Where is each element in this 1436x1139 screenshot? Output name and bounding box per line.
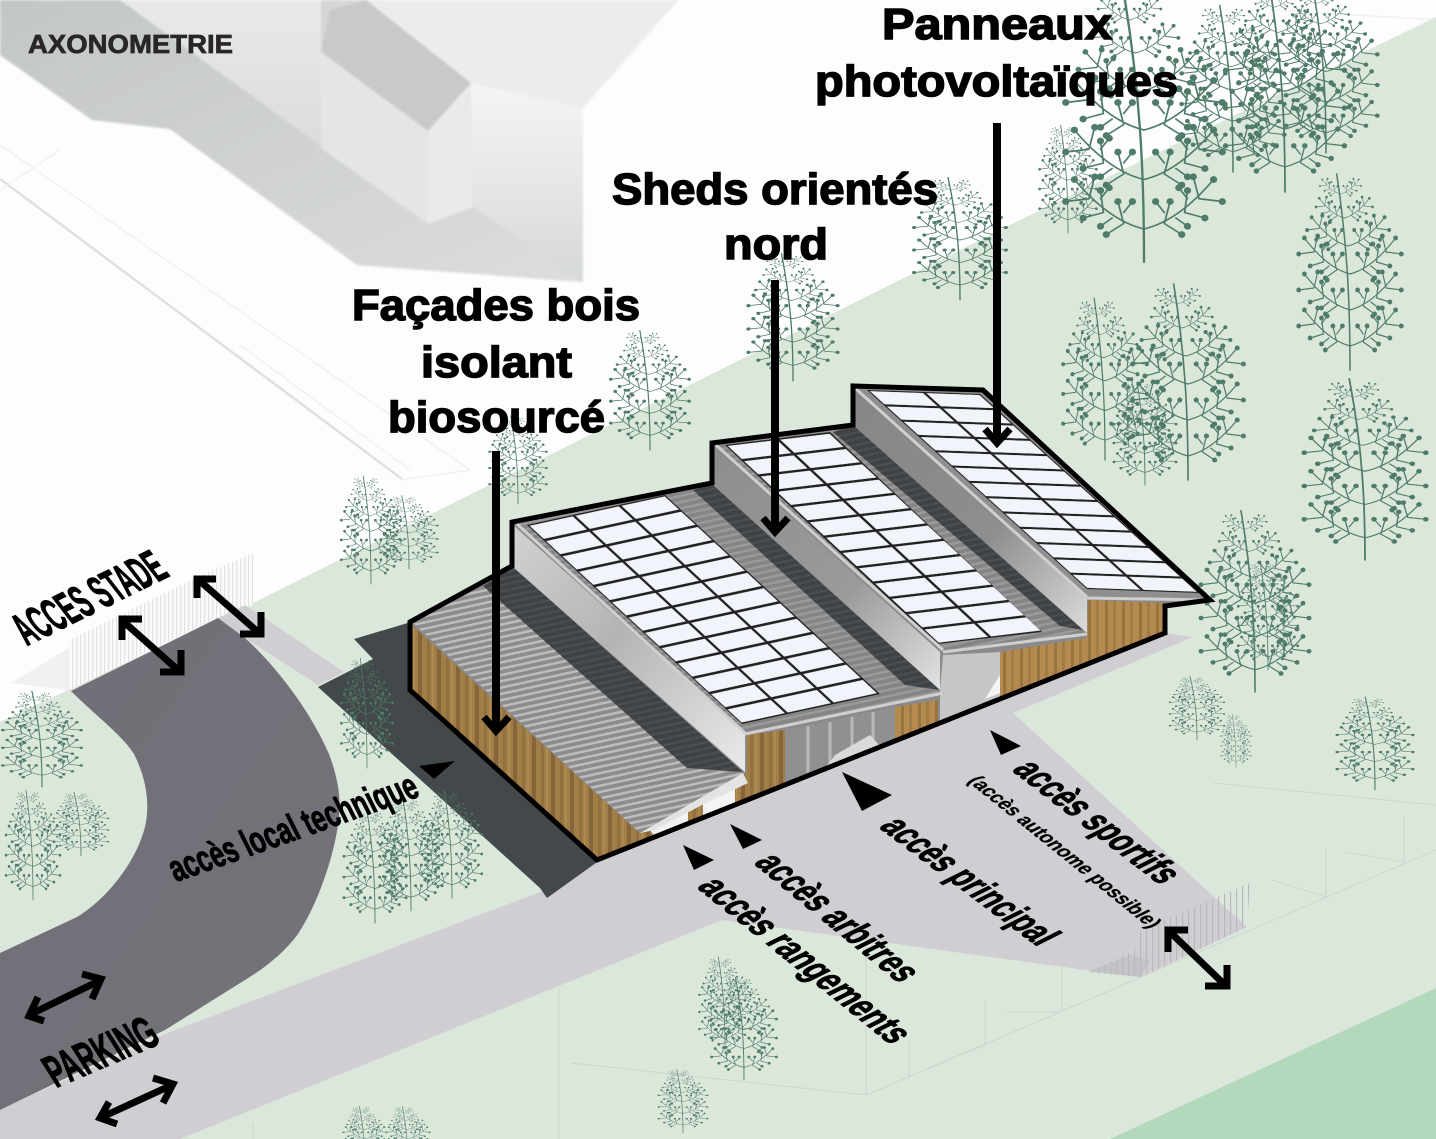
- fence: sports access: [1088, 883, 1250, 977]
- tree: [1220, 714, 1252, 768]
- corrugated roof: [412, 586, 743, 833]
- tree: [1, 691, 83, 787]
- front facade pieces: [610, 600, 1165, 854]
- shadow between shed 2 and shed 3: [833, 425, 1083, 630]
- tree: [53, 792, 109, 856]
- double arrow: stade 1: [122, 619, 181, 672]
- road: dark grey curved access road: [0, 618, 340, 1110]
- tree: [1296, 174, 1404, 370]
- road: light grey access path: [0, 633, 1247, 1139]
- tree: [379, 798, 443, 911]
- tree: [698, 957, 752, 1050]
- tree: [340, 476, 402, 584]
- building: [410, 386, 1210, 860]
- neighbouring building volume: [0, 0, 678, 282]
- tree: [5, 790, 61, 900]
- site lines: lower green: [253, 783, 1436, 1139]
- tree: [1179, 5, 1287, 172]
- shed 1 roof strip: [517, 490, 945, 733]
- label: acces sportifs: accès sportifs: [1003, 754, 1192, 889]
- tree: [379, 496, 439, 569]
- label: acces rangements: accès rangements: [688, 871, 923, 1049]
- label: acces local technique: accès local technique: [161, 766, 425, 890]
- solar panels: shed 3: [867, 390, 1200, 593]
- tree: [1061, 298, 1149, 460]
- solar panels: shed 1: [527, 495, 880, 724]
- heading: sheds orientes nord: Sheds orientés: [612, 165, 938, 214]
- tree: [1038, 125, 1098, 233]
- tree: [1113, 382, 1177, 485]
- tree: [1301, 379, 1429, 560]
- tree: [385, 1106, 431, 1139]
- shed 1 wall: [513, 525, 745, 772]
- tree: [1130, 284, 1246, 480]
- label: acces arbitres: accès arbitres: [745, 847, 931, 988]
- heading: sheds orientes nord: [612, 165, 938, 269]
- tree: [340, 658, 394, 768]
- heading: facades bois isolant biosource: isolant: [421, 338, 572, 387]
- shed 2 roof strip: [716, 430, 1087, 650]
- heading: facades bois isolant biosource: [352, 281, 640, 442]
- triangle: acces sportifs: [990, 730, 1021, 755]
- fence: stadium access: [11, 553, 253, 690]
- triangle: local technique: [419, 761, 455, 779]
- label: acces stade: ACCES STADE: [1, 541, 178, 655]
- roof overhang edge: [640, 773, 748, 833]
- tree: [342, 1106, 388, 1139]
- heading: panneaux photovoltaiques: [815, 0, 1178, 106]
- tree: [746, 254, 840, 381]
- double arrow: stade 2: [197, 579, 261, 634]
- tree: [658, 1069, 708, 1133]
- heading: panneaux photovoltaiques: photovoltaïques: [815, 57, 1178, 106]
- heading: facades bois isolant biosource: Façades bois: [352, 281, 640, 330]
- arrow: panels: [985, 123, 1010, 443]
- shed 2 wall: [712, 445, 940, 690]
- label: acces autonome possible: (accès autonome possible): [963, 773, 1166, 931]
- tree: [1062, 0, 1226, 262]
- double arrow: parking 1: [29, 974, 101, 1021]
- triangle: acces rangements: [683, 845, 714, 870]
- arrow: sheds: [763, 280, 788, 532]
- triangle: acces principal: [842, 772, 892, 811]
- tree: [912, 178, 1008, 300]
- light roof edges: [517, 389, 1207, 734]
- double arrow: parking 2: [100, 1078, 173, 1124]
- shed 3 roof strip: [856, 387, 1207, 598]
- triangle: acces arbitres: [730, 824, 762, 849]
- shadow between shed 1 and shed 2: [693, 484, 940, 690]
- heading: facades bois isolant biosource: biosourcé: [388, 393, 605, 442]
- road: upper light strip: [218, 605, 344, 685]
- tree: [343, 810, 407, 923]
- shadow on corrugated roof: [483, 567, 743, 772]
- tree: [1198, 511, 1312, 692]
- tree: [1335, 697, 1415, 790]
- tree: [1223, 0, 1347, 192]
- solar panels: shed 2: [725, 432, 1042, 644]
- tree: [1169, 676, 1225, 740]
- tree: [1237, 562, 1299, 670]
- label: acces principal: accès principal: [870, 811, 1070, 951]
- tree: [710, 977, 778, 1080]
- heading: sheds orientes nord: nord: [724, 220, 828, 269]
- shed 3 wall: [853, 387, 1087, 633]
- double arrow: sports access: [1168, 930, 1227, 986]
- tree: [488, 416, 548, 504]
- tree: [421, 790, 483, 898]
- building base: [410, 386, 1210, 860]
- ground: darker green pitch: [1110, 988, 1436, 1139]
- wood facade: left side: [412, 625, 645, 858]
- heading: panneaux photovoltaiques: Panneaux: [882, 0, 1113, 49]
- arrow: facades: [484, 451, 509, 731]
- building outline: [410, 386, 1210, 860]
- site lines: white area: [0, 10, 1436, 480]
- building shadow: [318, 622, 600, 898]
- label: parking: PARKING: [34, 1008, 168, 1097]
- tree: [1272, 0, 1380, 153]
- tree: [609, 330, 691, 450]
- title: axonometrie: AXONOMETRIE: [28, 29, 233, 59]
